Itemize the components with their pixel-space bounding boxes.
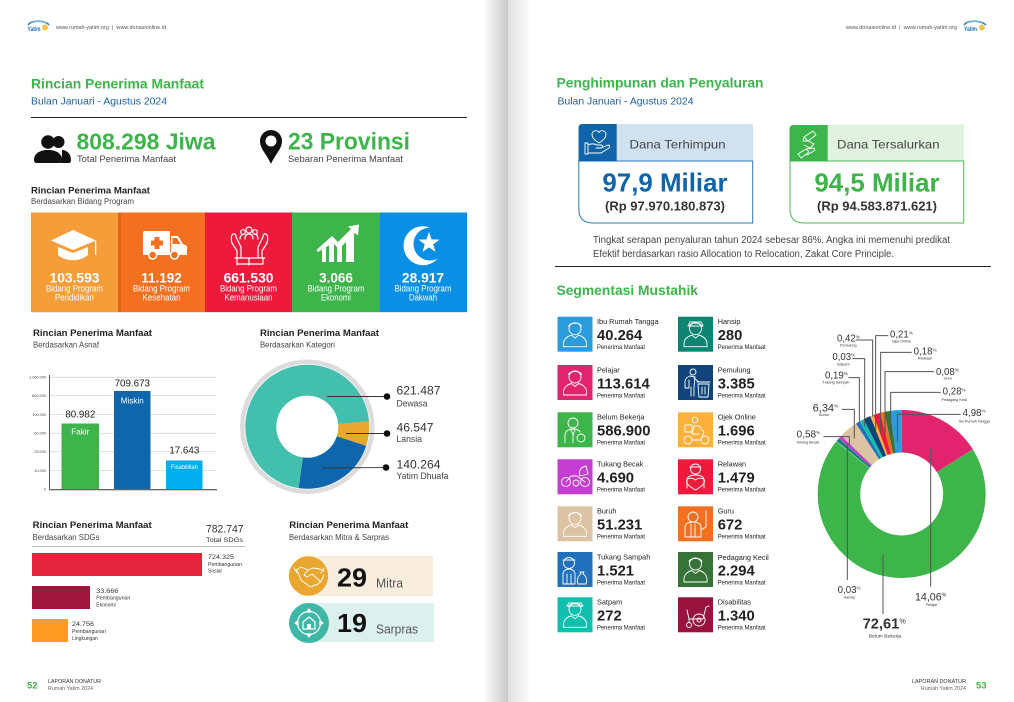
item: tukang becak	[558, 459, 645, 494]
heading: mitra dan sarpras	[289, 520, 408, 542]
panel: dana tersalurkan: Dana Tersalurkan	[837, 137, 940, 151]
heading: sdgs	[32, 520, 152, 542]
item: belum bekerja: 586.900	[597, 424, 650, 440]
panel: mitra	[289, 556, 433, 596]
icon: hands holding people	[231, 227, 268, 265]
bar chart: sdgs: Sosial	[208, 569, 222, 575]
donut leader lines and labels: %	[816, 430, 820, 435]
item: tukang becak: 4.690	[597, 471, 634, 487]
heading: mitra dan sarpras: Berdasarkan Mitra & Sarpras	[289, 533, 389, 542]
bar chart: asnaf: 80.982	[65, 409, 95, 420]
tile: dakwah: 28.917	[402, 271, 444, 286]
donut leader lines and labels: Satpam	[837, 363, 850, 367]
donut leader lines and labels: 0,03	[832, 352, 851, 363]
item: satpam	[558, 597, 645, 632]
donut leader lines and labels: Ojek Online	[892, 339, 911, 343]
donut chart: kategori: Lansia	[396, 434, 422, 444]
item: ibu rumah tangga	[558, 317, 659, 352]
tile: kemanusiaan: Kemanusiaan	[224, 293, 272, 303]
panel: dana terhimpun: 97,9 Miliar	[602, 170, 728, 198]
item: buruh: 51.231	[597, 518, 642, 534]
item: satpam: Satpam	[597, 598, 622, 607]
item: ibu rumah tangga: Ibu Rumah Tangga	[597, 317, 659, 326]
tile: ekonomi: Ekonomi	[321, 293, 351, 303]
heading: asnaf	[33, 328, 152, 350]
item: ibu rumah tangga: 40.264	[597, 328, 643, 344]
donut leader lines and labels: 0,58	[797, 429, 816, 440]
heading: kategori: Berdasarkan Kategori	[260, 341, 335, 350]
item: ojek online: 1.696	[718, 424, 755, 440]
donut leader lines and labels: 0,42	[837, 334, 856, 345]
bar chart: asnaf	[29, 375, 217, 492]
item: relawan: Relawan	[718, 460, 746, 469]
donut leader lines and labels: 14,06	[915, 592, 942, 604]
header right: websites and logo: Yatim	[964, 26, 977, 33]
item: guru: 672	[718, 518, 742, 534]
item: tukang sampah: Tukang Sampah	[597, 552, 650, 561]
icon: map pin	[260, 130, 282, 164]
donut leader lines and labels: %	[899, 616, 906, 625]
donut leader lines and labels: %	[961, 387, 966, 392]
icon: hand with heart	[585, 131, 610, 154]
title: Penghimpunan dan Penyaluran	[556, 74, 764, 107]
tile: ekonomi: Bidang Program	[308, 284, 364, 294]
panel: dana terhimpun	[578, 124, 753, 223]
item: pelajar: Penerima Manfaat	[597, 392, 645, 399]
heading: bidang program: Berdasarkan Bidang Program	[31, 197, 134, 206]
item: pedagang kecil: Penerima Manfaat	[718, 579, 766, 586]
header left: logo and websites	[28, 21, 166, 33]
bar chart: sdgs: 33.666	[96, 588, 119, 595]
panel: bidang program tiles	[31, 212, 467, 313]
item: ibu rumah tangga: Penerima Manfaat	[597, 344, 645, 351]
bar chart: asnaf: 0	[44, 488, 46, 492]
donut leader lines and labels: %	[834, 403, 839, 409]
donut leader lines and labels: Belum Bekerja	[869, 633, 901, 639]
item: hansip: 280	[718, 328, 742, 344]
bar chart: asnaf: 60.000	[34, 432, 46, 436]
total penerima manfaat: 808.298 Jiwa	[76, 128, 216, 154]
tile: ekonomi: 3.066	[319, 271, 353, 286]
donut leader lines and labels: %	[909, 330, 913, 335]
icon: handshake	[294, 567, 324, 587]
item: satpam: Penerima Manfaat	[597, 625, 645, 632]
item: pemulung: Penerima Manfaat	[718, 392, 766, 399]
donut leader lines and labels: 0,21	[890, 330, 909, 341]
donut leader lines and labels: Tukang Becak	[796, 441, 819, 445]
item: relawan: Penerima Manfaat	[718, 487, 766, 494]
bar chart: asnaf: 1.000.000	[29, 376, 46, 380]
donut leader lines and labels: 72,61	[863, 617, 899, 633]
icon: giving hands	[798, 131, 816, 158]
item: pemulung: 3.385	[718, 376, 755, 392]
text block: tingkat serapan: Tingkat serapan penyaluran tahun 2024 sebesar 86%. Angka ini memenuhi predikat	[593, 235, 950, 246]
item: belum bekerja	[558, 412, 650, 447]
icon: ambulance	[143, 231, 187, 259]
donut leader lines and labels: Pelajar	[926, 603, 938, 607]
item: pedagang kecil	[678, 552, 769, 587]
total penerima manfaat: Total Penerima Manfaat	[77, 154, 177, 164]
donut leader lines and labels: Tukang Sampah	[823, 381, 849, 385]
footer left: LAPORAN DONATUR	[48, 679, 101, 685]
heading: sdgs: Berdasarkan SDGs	[32, 533, 100, 542]
tile: kesehatan: Kesehatan	[142, 293, 180, 303]
bar chart: sdgs: Ekonomi	[96, 603, 116, 609]
bar chart: sdgs: 24.756	[72, 621, 94, 628]
header right: websites and logo: www.donasionline.id | www.rumah-yatim.org	[846, 25, 957, 31]
bar chart: asnaf: Fakir	[71, 426, 89, 436]
donut leader lines and labels	[796, 330, 991, 639]
bar chart: asnaf: 25.000	[34, 450, 46, 454]
footer right: Rumah Yatim 2024	[921, 686, 966, 692]
tile: dakwah: Bidang Program	[394, 284, 452, 294]
tile: kesehatan	[118, 212, 205, 312]
book spine shadow	[483, 0, 532, 702]
donut leader lines and labels: Guru	[944, 377, 952, 381]
donut chart: segmentasi mustahik	[796, 330, 991, 639]
title: Rincian Penerima Manfaat: Bulan Januari - Agustus 2024	[31, 95, 167, 107]
item: pemulung: Pemulung	[718, 365, 751, 374]
tile: ekonomi	[292, 212, 380, 312]
item: relawan	[678, 459, 766, 494]
item: tukang becak: Penerima Manfaat	[597, 487, 645, 494]
heading: bidang program	[31, 185, 150, 206]
header left: logo and websites: Yatim	[28, 26, 41, 33]
total sdgs: Total SDGs	[206, 537, 244, 544]
title: Penghimpunan dan Penyaluran: Bulan Januari - Agustus 2024	[558, 95, 694, 107]
item: belum bekerja: Belum Bekerja	[597, 413, 645, 422]
bar chart: asnaf: 709.673	[115, 378, 151, 389]
donut leader lines and labels: 0,08	[936, 367, 955, 378]
header left: logo and websites: www.rumah-yatim.org | www.donasionline.id	[56, 25, 166, 31]
title: Rincian Penerima Manfaat: Rincian Penerima Manfaat	[31, 75, 204, 91]
panel: dana tersalurkan	[790, 124, 964, 223]
donut leader lines and labels: %	[844, 371, 848, 376]
item: hansip	[678, 317, 766, 352]
donut leader lines and labels: 0,19	[825, 370, 844, 381]
item: tukang sampah: 1.521	[597, 563, 634, 579]
item: disabilitas: Disabilitas	[718, 598, 751, 607]
footer right: LAPORAN DONATUR	[912, 679, 966, 685]
donut leader lines and labels: %	[856, 586, 861, 591]
item: disabilitas: Penerima Manfaat	[718, 625, 766, 632]
tile: dakwah: Dakwah	[409, 293, 437, 303]
panel: dana terhimpun: (Rp 97.970.180.873)	[605, 199, 725, 214]
total sdgs: 782.747	[206, 523, 244, 535]
item: disabilitas: 1.340	[718, 609, 755, 625]
bar chart: sdgs: Lingkungan	[72, 636, 98, 642]
bar chart: sdgs: 724.325	[208, 554, 234, 561]
tile: kesehatan: 11.192	[141, 271, 182, 286]
donut chart: kategori: Yatim Dhuafa	[396, 471, 449, 481]
donut chart: kategori: 140.264	[396, 457, 441, 471]
donut leader lines and labels: Ibu Rumah Tangga	[959, 420, 991, 424]
donut leader lines and labels: 0,03	[838, 585, 856, 596]
item: pelajar: Pelajar	[597, 365, 620, 374]
donut leader lines and labels: 0,28	[943, 387, 961, 398]
donut leader lines and labels: %	[856, 334, 860, 339]
bar chart: sdgs: Pembangunan	[96, 596, 131, 602]
donut leader lines and labels: 4,98	[963, 408, 981, 419]
item: hansip: Penerima Manfaat	[718, 344, 766, 351]
panel: dana tersalurkan: (Rp 94.583.871.621)	[817, 199, 937, 214]
item: guru	[678, 506, 766, 541]
bar chart: asnaf: Fisabilillah	[171, 464, 198, 471]
item: buruh: Penerima Manfaat	[597, 534, 645, 541]
donut chart: kategori: 46.547	[396, 421, 434, 435]
donut leader lines and labels: 0,18	[914, 347, 932, 358]
donut leader lines and labels: Buruh	[819, 413, 829, 417]
tile: kesehatan: Bidang Program	[133, 284, 190, 294]
footer left: 52	[27, 680, 38, 692]
tile: kemanusiaan	[205, 212, 292, 312]
item: pelajar	[558, 365, 650, 400]
donut leader lines and labels: %	[932, 347, 937, 352]
donut chart: kategori: Dewasa	[396, 398, 428, 408]
item: tukang sampah	[558, 552, 650, 587]
panel: dana tersalurkan: 94,5 Miliar	[814, 170, 940, 198]
icon: graduation cap	[51, 230, 96, 260]
title: Penghimpunan dan Penyaluran: Penghimpunan dan Penyaluran	[556, 74, 764, 90]
heading: mitra dan sarpras: Rincian Penerima Manfaat	[289, 520, 408, 530]
donut leader lines and labels: Pemulung	[840, 344, 857, 348]
heading: kategori: Rincian Penerima Manfaat	[260, 328, 379, 338]
item: tukang becak: Tukang Becak	[597, 460, 644, 469]
tile: kemanusiaan: 661.530	[224, 271, 274, 286]
bar chart: asnaf: 100.000	[32, 413, 46, 417]
bar chart: asnaf: 10.000	[34, 469, 46, 473]
item: tukang sampah: Penerima Manfaat	[597, 579, 645, 586]
item: buruh	[558, 506, 645, 541]
icon: growth chart	[316, 224, 359, 262]
item: satpam: 272	[597, 609, 622, 625]
item: ojek online: Penerima Manfaat	[718, 440, 766, 447]
total sdgs	[206, 523, 244, 544]
sebaran provinsi: 23 Provinsi	[288, 128, 410, 155]
tile: pendidikan	[31, 212, 118, 312]
panel: mitra: Mitra	[376, 576, 403, 590]
panel: sarpras: Sarpras	[376, 622, 418, 636]
footer right: 53	[976, 680, 987, 692]
item: disabilitas	[678, 597, 766, 632]
footer left	[27, 679, 101, 692]
footer right	[912, 679, 987, 692]
item: hansip: Hansip	[718, 317, 740, 326]
icon: crescent and star	[404, 226, 446, 265]
heading: asnaf: Berdasarkan Asnaf	[33, 341, 100, 350]
heading: segmentasi mustahik: Segmentasi Mustahik	[556, 282, 698, 298]
heading: sdgs: Rincian Penerima Manfaat	[33, 520, 152, 530]
item: guru: Penerima Manfaat	[718, 534, 766, 541]
tile: kemanusiaan: Bidang Program	[220, 284, 277, 294]
item: pedagang kecil: Pedagang Kecil	[718, 553, 769, 562]
total penerima manfaat	[34, 128, 216, 164]
header right: websites and logo	[846, 21, 986, 33]
heading: kategori	[260, 328, 379, 350]
panel: sarpras	[289, 603, 434, 643]
text block: tingkat serapan: Efektif berdasarkan rasio Allocation to Relocation, Zakat Core Principle.	[593, 249, 894, 260]
tile: pendidikan: Bidang Program	[46, 284, 103, 294]
donut leader lines and labels: %	[942, 593, 947, 599]
bar chart: sdgs: Pembangunan	[72, 629, 106, 635]
icon: mosque emblem	[295, 609, 323, 637]
donut leader lines and labels: %	[981, 409, 986, 414]
donut chart: kategori	[242, 362, 449, 492]
item: relawan: 1.479	[718, 471, 755, 487]
footer left: Rumah Yatim 2024	[48, 686, 93, 692]
donut leader lines and labels: Relawan	[918, 357, 932, 361]
bar chart: asnaf: Miskin	[121, 395, 144, 405]
donut leader lines and labels: Pedagang Kecil	[942, 398, 967, 402]
donut chart: kategori: 621.487	[396, 384, 441, 398]
donut leader lines and labels: Hansip	[844, 596, 855, 600]
bar chart: asnaf: 17.643	[169, 445, 200, 456]
donut leader lines and labels: %	[851, 353, 855, 358]
sebaran provinsi	[260, 128, 410, 164]
panel: mitra: 29	[337, 563, 367, 593]
item: ojek online: Ojek Online	[718, 413, 756, 422]
bar chart: sdgs	[32, 553, 242, 642]
item: pelajar: 113.614	[597, 376, 650, 392]
item: belum bekerja: Penerima Manfaat	[597, 440, 645, 447]
text block: tingkat serapan	[593, 235, 950, 260]
tile: pendidikan: Pendidikan	[55, 293, 94, 303]
item: pemulung	[678, 365, 766, 400]
item: buruh: Buruh	[597, 507, 616, 516]
donut leader lines and labels: 6,34	[813, 402, 834, 414]
panel: dana terhimpun: Dana Terhimpun	[630, 137, 726, 151]
tile: pendidikan: 103.593	[50, 271, 100, 286]
item: guru: Guru	[718, 507, 734, 516]
heading: bidang program: Rincian Penerima Manfaat	[31, 185, 150, 195]
bar chart: sdgs: Pembangunan	[208, 562, 242, 568]
donut leader lines and labels: %	[955, 368, 959, 373]
bar chart: asnaf: 800.000	[32, 394, 46, 398]
panel: sarpras: 19	[337, 608, 367, 638]
sebaran provinsi: Sebaran Penerima Manfaat	[288, 154, 404, 164]
title: Rincian Penerima Manfaat	[31, 75, 204, 107]
item: ojek online	[678, 412, 766, 447]
tile: dakwah	[380, 212, 467, 312]
icon: people	[34, 135, 71, 163]
heading: asnaf: Rincian Penerima Manfaat	[33, 328, 152, 338]
item: pedagang kecil: 2.294	[718, 563, 755, 579]
